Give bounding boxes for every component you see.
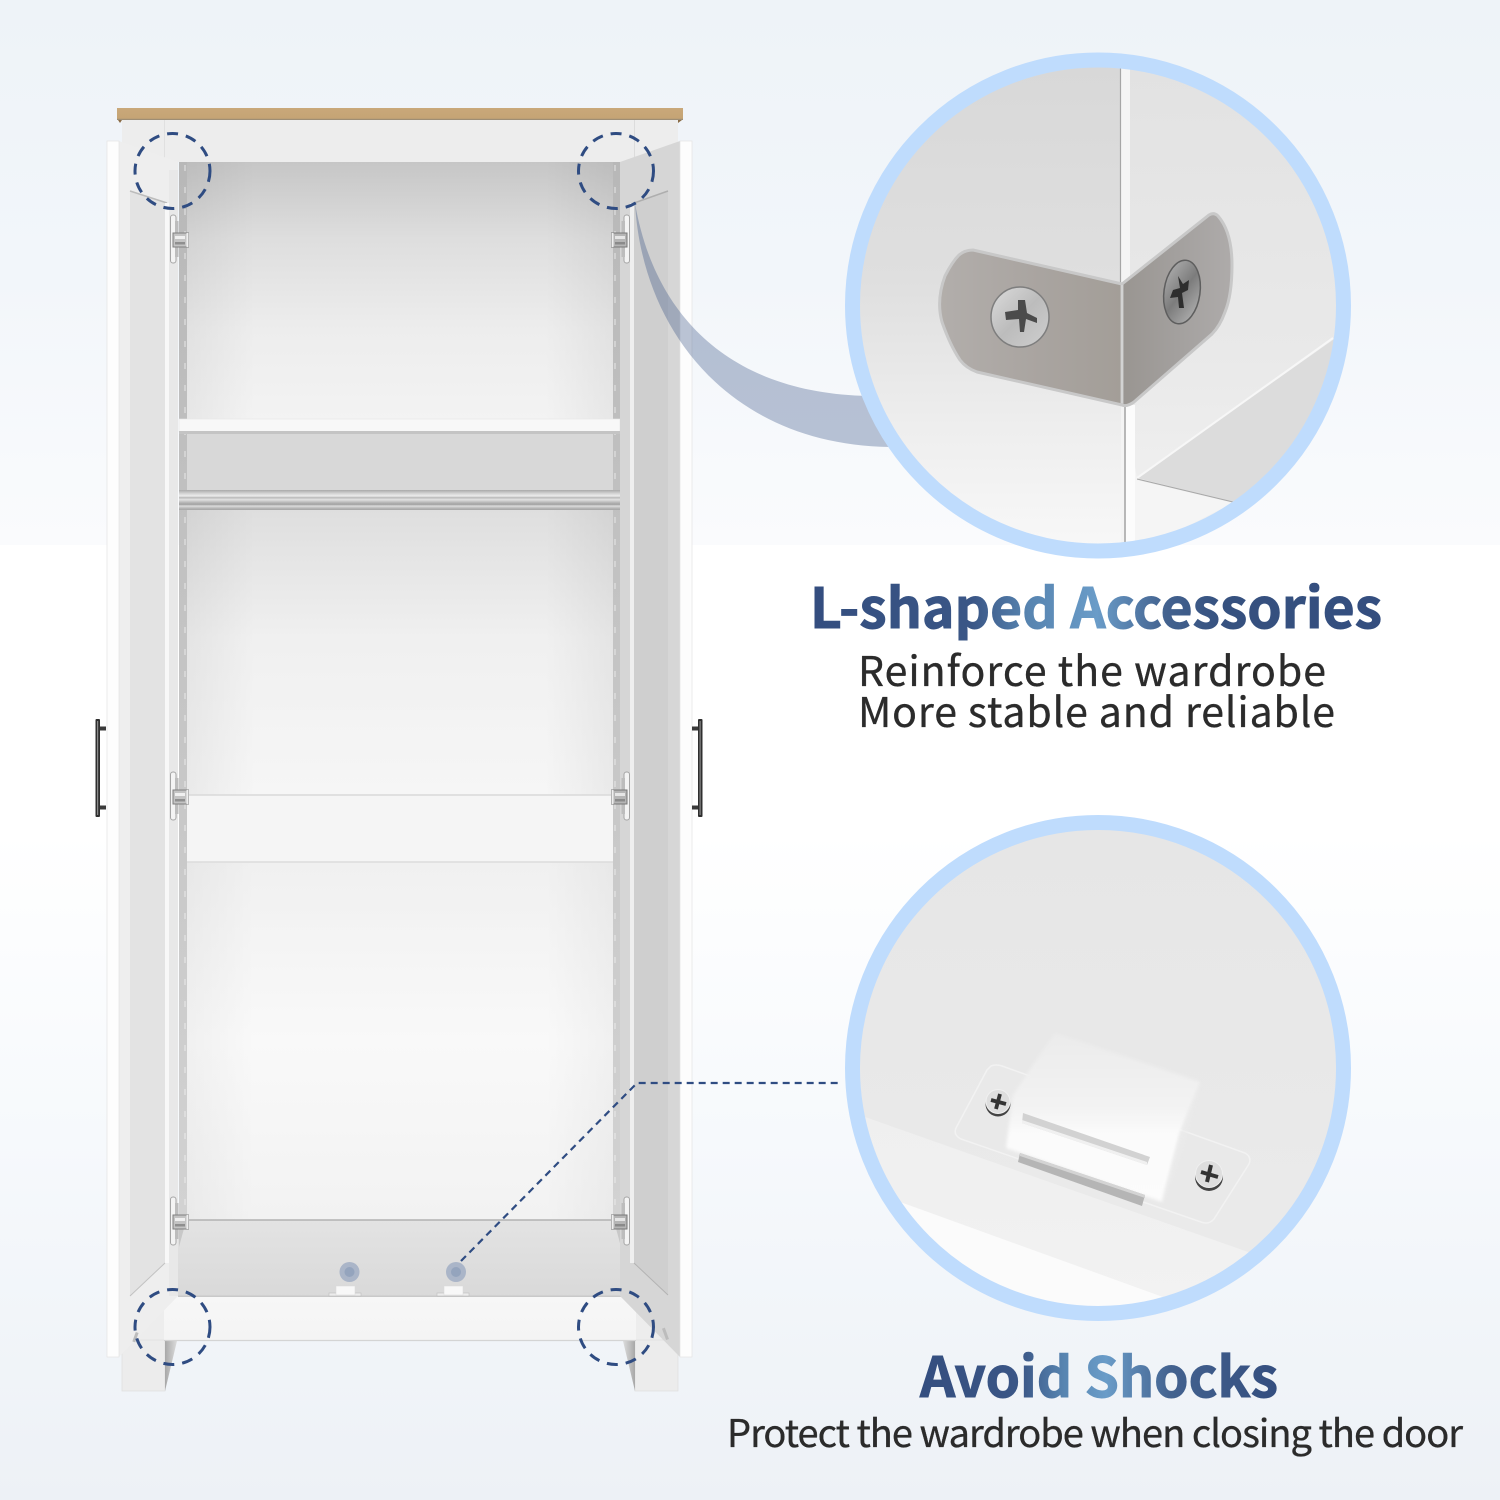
- right door handle: [692, 719, 702, 817]
- shelf: [179, 419, 620, 434]
- bracket screw right: [1160, 258, 1204, 326]
- dashed leader line to door catch circle: [461, 1083, 840, 1261]
- carcase frame and legs: [122, 120, 678, 1391]
- door catch right: [437, 1286, 469, 1296]
- mounting plate: [955, 1065, 1250, 1223]
- light blue ring: [852, 60, 1344, 551]
- cabinet floor: [178, 1220, 622, 1297]
- heading: L-shaped Accessories: L-shaped Accessories: [810, 564, 1382, 644]
- dashed marker circle top left: [135, 134, 210, 208]
- cross rail panel: [187, 795, 613, 862]
- hanging rod: [179, 490, 620, 510]
- bracket screw left: [991, 287, 1049, 347]
- marker dot right: [446, 1262, 466, 1282]
- left bottom hinge: [170, 1197, 188, 1245]
- interior back below shelf: [179, 432, 621, 492]
- description: Avoid Shocks: Protect the wardrobe when closing the door: [727, 1403, 1463, 1458]
- left door outer edge: [107, 141, 119, 1357]
- right door inner face: [620, 141, 680, 1357]
- background lower band: [0, 545, 1500, 1500]
- bottom rail: [164, 1297, 636, 1340]
- right door outer edge: [680, 141, 692, 1357]
- left door inner face: [119, 141, 178, 1357]
- heading: Avoid Shocks: Avoid Shocks: [919, 1333, 1278, 1413]
- circle photo content: [855, 825, 1345, 1320]
- detail circle: magnetic door catch: [852, 822, 1345, 1320]
- background upper band: [0, 0, 1500, 545]
- left door handle: [96, 719, 106, 817]
- metal L bracket: [940, 214, 1232, 406]
- left middle hinge: [170, 772, 188, 820]
- description: L-shaped accessories: Reinforce the wardrobe: [858, 638, 1326, 698]
- dashed marker circle bottom right: [578, 1290, 654, 1364]
- description: L-shaped accessories: More stable and reliable: [858, 679, 1335, 739]
- interior back upper section: [179, 162, 621, 420]
- catch screw right: [1195, 1160, 1223, 1191]
- right middle hinge: [612, 772, 630, 820]
- catch screw left: [986, 1090, 1010, 1116]
- dashed marker circle top right: [578, 134, 654, 208]
- marker dot left: [340, 1262, 360, 1282]
- wardrobe with open doors: [96, 108, 702, 1391]
- left interior side with shelf pin holes: [179, 162, 187, 1220]
- right interior side with shelf pin holes: [613, 162, 621, 1220]
- door catch left: [329, 1286, 361, 1296]
- interior back hanging section: [179, 508, 621, 798]
- wood top board: [117, 108, 683, 123]
- circle photo content: [855, 60, 1346, 550]
- interior back lower section: [179, 860, 621, 1222]
- light blue ring: [852, 822, 1344, 1314]
- callout swoosh to L-bracket circle: [635, 203, 895, 447]
- left top hinge: [170, 215, 188, 263]
- upper metal strip: [1022, 1113, 1150, 1165]
- dashed marker circle bottom left: [135, 1290, 210, 1364]
- right bottom hinge: [612, 1197, 630, 1245]
- lower metal strip: [1018, 1153, 1145, 1206]
- catch block: [1006, 1033, 1200, 1202]
- right top hinge: [612, 215, 630, 263]
- detail circle: L-shaped bracket: [852, 60, 1346, 551]
